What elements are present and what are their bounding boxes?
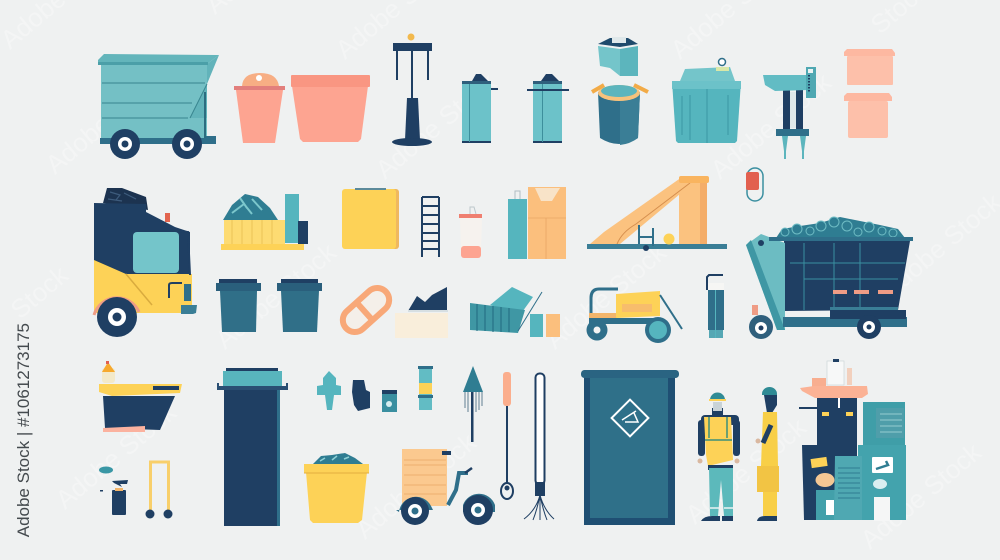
icon: loaded dumpster trailer — [746, 217, 913, 339]
icon: tall teal bin with side ticks — [527, 74, 569, 143]
icon: small recycling canister — [382, 390, 397, 412]
icon: large salmon tub — [291, 75, 370, 142]
icon: orange delivery cart — [396, 449, 495, 525]
icon: teal wash basin on stand — [763, 67, 816, 159]
icon: peach handled tool — [501, 372, 513, 499]
text: Adobe Stock — [855, 436, 988, 555]
text: Adobe Stock — [540, 236, 673, 355]
icon: orange chain link — [338, 283, 394, 337]
icon: yellow and navy basin with bottle — [99, 361, 182, 432]
icon: orange conveyor ramp — [587, 176, 727, 251]
icon: rake — [524, 374, 554, 520]
icon: stacked sorting station — [799, 359, 906, 521]
icon: small teal cup — [530, 314, 543, 337]
icon: dark teal bin left — [216, 279, 261, 332]
icon: detached teal bucket lid — [598, 37, 638, 76]
icon: tall teal bin — [462, 74, 498, 143]
icon: tall canister with handle — [707, 275, 724, 338]
icon: red tag — [746, 168, 763, 201]
icon: navy ladder — [422, 197, 439, 257]
icon: yellow utility tractor — [586, 289, 682, 343]
icon: small navy spray canister — [99, 466, 128, 515]
icon: yellow hand cart frame — [146, 462, 172, 518]
icon: small orange cup — [546, 314, 560, 337]
icon: slanted teal crate — [470, 287, 542, 333]
icon: garbage truck cab — [94, 188, 197, 337]
icon: stacked teal and yellow canister — [418, 366, 433, 410]
icon: stacked peach boxes — [844, 49, 895, 138]
icon: teal plug — [317, 371, 341, 410]
text: Adobe Stock — [680, 411, 813, 530]
icon: large teal door panel with logo — [581, 370, 679, 525]
text: Adobe Stock — [705, 66, 838, 185]
icon: worker in yellow coveralls — [756, 387, 779, 521]
icon: tall navy bin — [217, 368, 288, 526]
icon: worker in yellow vest — [698, 393, 740, 521]
icon: teal dumpster on wheels — [98, 54, 219, 159]
icon: large teal container — [672, 58, 741, 143]
icon: yellow bucket with debris — [304, 453, 369, 523]
text: Adobe Stock — [350, 426, 483, 545]
icon: dark teal bin right — [277, 279, 322, 332]
icon: salmon-capped cup — [459, 207, 482, 258]
watermark credit: Adobe Stock | #1061273175 — [14, 323, 33, 537]
icon: yellow crate with pile and cylinder — [221, 194, 308, 250]
text: Adobe Stock — [50, 396, 183, 515]
icon: navy lamp stand — [392, 34, 432, 146]
icon: yellow plate — [342, 188, 399, 249]
icon: teal and orange bags — [508, 187, 566, 259]
text: Adobe Stock — [370, 66, 503, 185]
icon: salmon bin with lid — [234, 73, 285, 143]
icon: navy clip — [352, 380, 370, 411]
text: Adobe Stock — [210, 236, 343, 355]
icon: dark teal bucket with orange rim — [592, 85, 648, 145]
text: Stock — [5, 259, 74, 325]
text: Adobe Stock — [40, 61, 173, 180]
icon: cream box with dark fold — [395, 287, 448, 338]
icon: teal broom head — [463, 366, 483, 442]
